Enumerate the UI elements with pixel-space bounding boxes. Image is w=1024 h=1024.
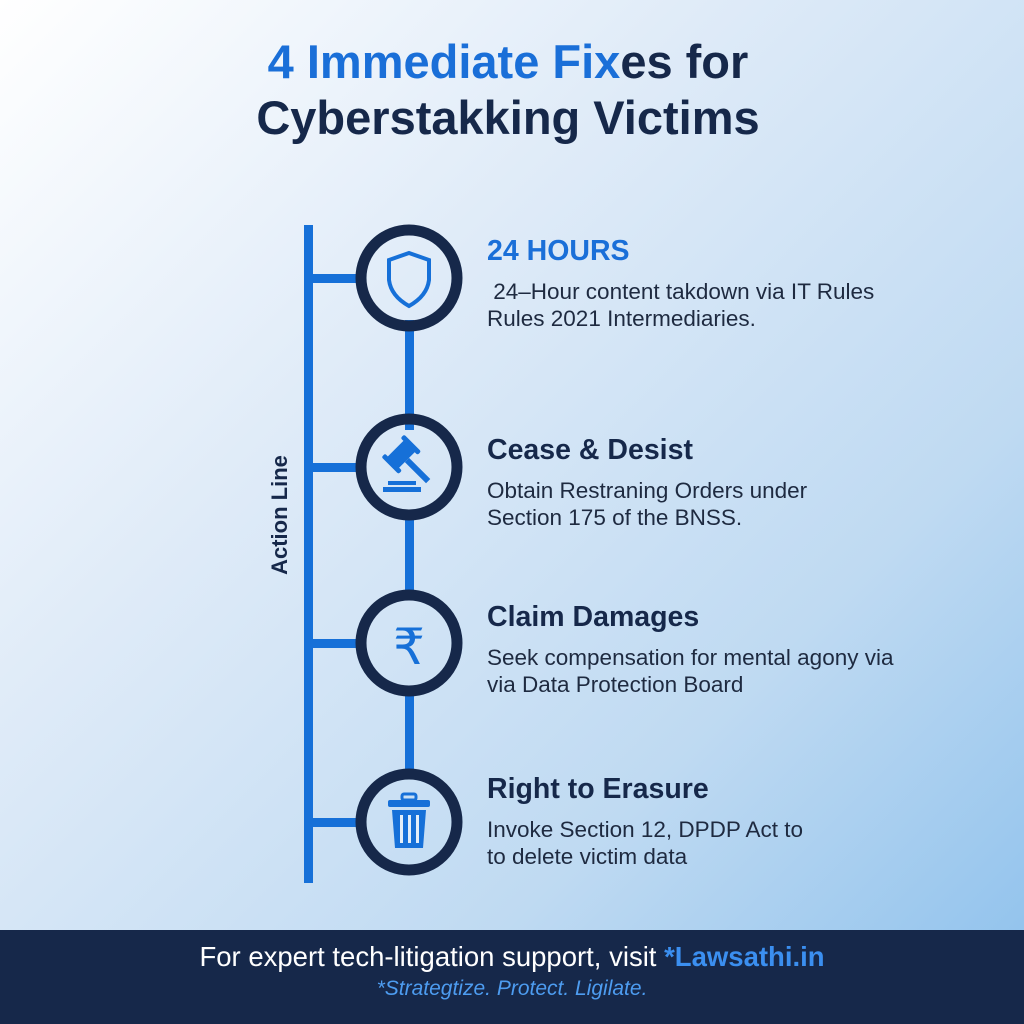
step 1 text: 24–Hour content takdown via IT Rules [493, 279, 874, 304]
step 4 text: to delete victim data [487, 844, 687, 869]
step 4 text [487, 773, 803, 869]
step 4 text: Invoke Section 12, DPDP Act to [487, 817, 803, 842]
step 3 text [487, 601, 894, 697]
step 2 text: Obtain Restraning Orders under [487, 478, 807, 503]
step 2 text: Section 175 of the BNSS. [487, 505, 742, 530]
title: 4 Immediate Fixes for [268, 35, 748, 88]
footer: For expert tech-litigation support, visit *Lawsathi.in [199, 941, 825, 972]
icon: gavel [361, 419, 457, 515]
step 4 text: Right to Erasure [487, 773, 709, 805]
step 1 text: Rules 2021 Intermediaries. [487, 306, 756, 331]
action line spine [304, 225, 414, 883]
title [256, 35, 760, 144]
step 2 text: Cease & Desist [487, 434, 693, 466]
icon: shield [361, 230, 457, 326]
step 1 text [487, 235, 874, 331]
step 2 text [487, 434, 807, 530]
footer [0, 930, 1024, 1024]
label: action line: Action Line [267, 455, 292, 575]
step 3 text: Seek compensation for mental agony via [487, 645, 893, 670]
icon: rupee: ₹ [393, 618, 425, 676]
icon: trash [361, 774, 457, 870]
step 1 text: 24 HOURS [487, 235, 630, 267]
step 3 text: Claim Damages [487, 601, 699, 633]
title: Cyberstakking Victims [256, 91, 760, 144]
footer: *Strategtize. Protect. Ligilate. [377, 977, 647, 1000]
step 3 text: via Data Protection Board [487, 672, 743, 697]
icon: rupee [361, 595, 457, 691]
